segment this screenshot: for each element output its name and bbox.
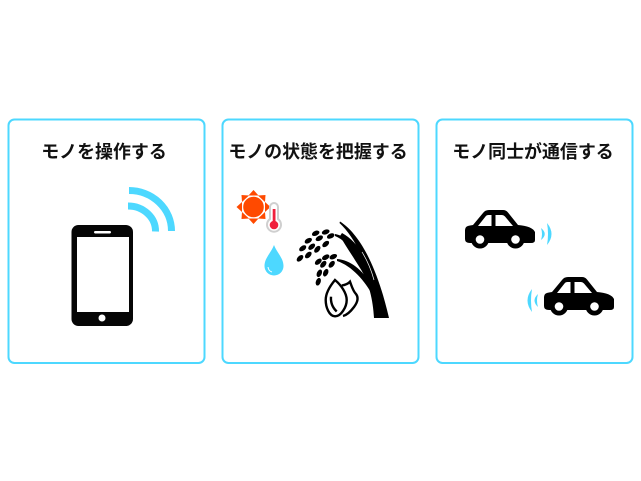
icon: rice grains closeup xyxy=(326,280,357,316)
heading: monitor: モノの状態を把握する xyxy=(228,141,408,162)
icon: sun xyxy=(236,190,270,224)
icon: water drop xyxy=(264,245,284,276)
icon: wifi signal xyxy=(128,190,172,232)
icon: thermometer xyxy=(267,203,281,232)
heading: operate: モノを操作する xyxy=(41,142,167,162)
icon: car upper xyxy=(465,210,535,248)
panel: operate things xyxy=(8,120,204,363)
heading: communicate: モノ同士が通信する xyxy=(452,141,614,162)
icon: signal from upper car xyxy=(541,223,552,245)
panel: monitor things xyxy=(222,120,418,363)
icon: rice plant xyxy=(295,222,389,318)
icon: car lower xyxy=(544,277,614,316)
icon: signal from lower car xyxy=(528,289,538,312)
panel: things communicate xyxy=(436,120,632,363)
icon: smartphone xyxy=(72,225,133,326)
